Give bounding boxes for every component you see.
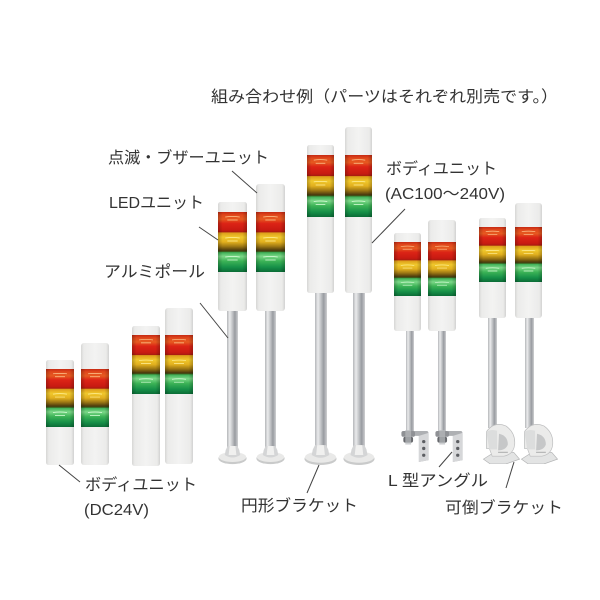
body bbox=[218, 202, 247, 311]
pole bbox=[265, 311, 276, 451]
tilt bracket bbox=[521, 424, 558, 464]
lamps bbox=[165, 335, 193, 394]
label: tilt bracket: 可倒ブラケット bbox=[445, 498, 563, 517]
tower: pole mount 1 bbox=[218, 202, 247, 464]
body bbox=[345, 127, 372, 293]
label: round bracket bbox=[241, 465, 358, 515]
lamps bbox=[81, 369, 109, 427]
round bracket bbox=[343, 445, 375, 465]
label: tilt bracket bbox=[445, 462, 563, 517]
tower: L-angle 1 bbox=[394, 233, 429, 462]
lamps bbox=[515, 227, 542, 282]
tower: tilt 2 bbox=[515, 203, 558, 464]
lamps bbox=[345, 155, 372, 217]
label: L angle bbox=[388, 452, 488, 490]
pole bbox=[315, 293, 327, 451]
tower: DC24V tall 1 bbox=[132, 326, 160, 466]
tilt bracket bbox=[483, 424, 520, 464]
lamps bbox=[394, 242, 421, 296]
pole bbox=[525, 318, 534, 428]
label: body unit DC bbox=[59, 465, 197, 519]
label: flash buzzer unit: 点滅・ブザーユニット bbox=[108, 148, 269, 167]
tower: DC24V short 1 bbox=[46, 360, 74, 465]
lamps bbox=[479, 227, 506, 282]
label: flash buzzer unit bbox=[108, 148, 269, 193]
lamps bbox=[132, 335, 160, 394]
round bracket bbox=[304, 445, 337, 465]
label: L angle: L 型アングル bbox=[388, 472, 488, 490]
lamps bbox=[218, 212, 247, 272]
body bbox=[46, 360, 74, 465]
tower: pole mount 4 bbox=[343, 127, 375, 465]
label: body unit AC: (AC100〜240V) bbox=[385, 186, 505, 203]
label: body unit DC: ボディユニット bbox=[85, 475, 197, 494]
tower: tilt 1 bbox=[479, 218, 520, 464]
body bbox=[165, 308, 193, 464]
pole bbox=[353, 293, 365, 451]
lamps bbox=[428, 242, 456, 296]
label: body unit DC: (DC24V) bbox=[84, 502, 149, 519]
title: 組み合わせ例（パーツはそれぞれ別売です。） bbox=[211, 88, 558, 106]
body bbox=[515, 203, 542, 318]
round bracket bbox=[256, 446, 285, 464]
body bbox=[132, 326, 160, 466]
body bbox=[81, 343, 109, 465]
round bracket bbox=[218, 446, 247, 464]
label: LED unit bbox=[109, 195, 218, 240]
label: body unit AC: ボディユニット bbox=[386, 159, 497, 178]
label: LED unit: LEDユニット bbox=[109, 195, 204, 212]
label: body unit AC bbox=[372, 159, 505, 243]
label: aluminium pole: アルミポール bbox=[104, 263, 205, 281]
tower: pole mount 3 bbox=[304, 145, 337, 465]
body bbox=[428, 220, 456, 331]
L bracket bbox=[401, 430, 429, 462]
L bracket bbox=[435, 430, 463, 462]
body bbox=[307, 145, 334, 293]
body bbox=[394, 233, 421, 331]
lamps bbox=[46, 369, 74, 427]
tower: DC24V short 2 bbox=[81, 343, 109, 465]
tower: DC24V tall 2 bbox=[165, 308, 193, 464]
pole bbox=[227, 311, 238, 451]
body bbox=[256, 184, 285, 311]
pole bbox=[488, 318, 497, 428]
label: aluminium pole bbox=[104, 263, 228, 338]
tower: pole mount 2 bbox=[256, 184, 285, 464]
label: round bracket: 円形ブラケット bbox=[241, 496, 358, 515]
tower: L-angle 2 bbox=[428, 220, 463, 462]
lamps bbox=[307, 155, 334, 217]
lamps bbox=[256, 212, 285, 272]
pole bbox=[438, 331, 446, 433]
body bbox=[479, 218, 506, 318]
pole bbox=[406, 331, 414, 433]
